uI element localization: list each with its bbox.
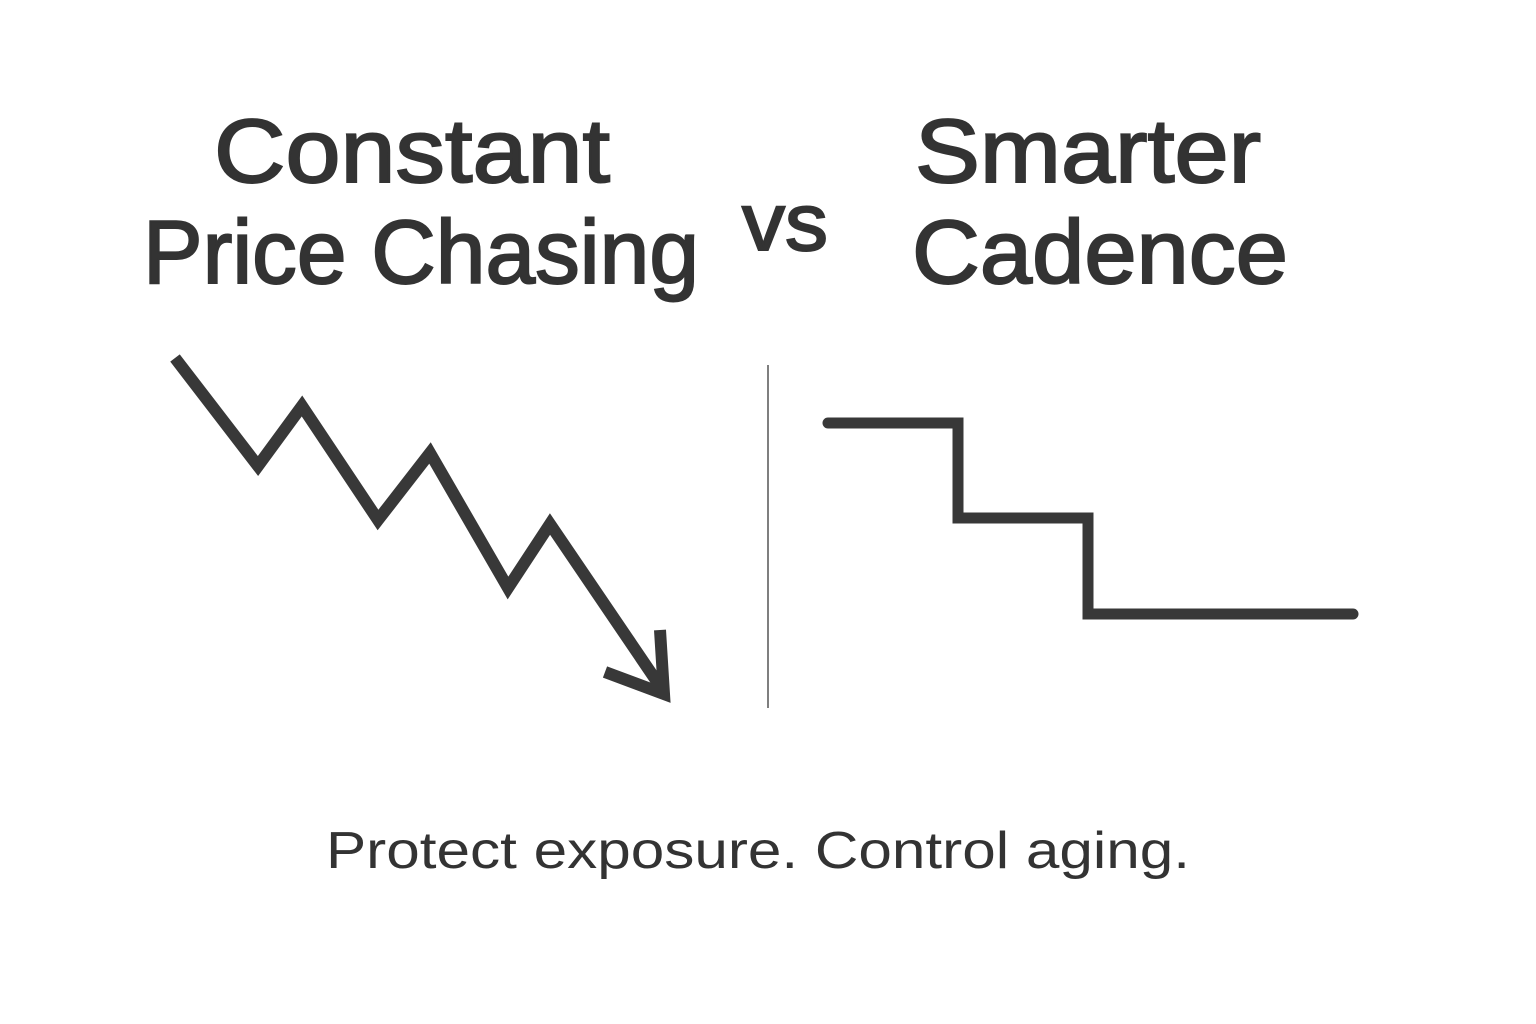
- title: right: Cadence: [912, 203, 1288, 303]
- chart: zigzag down arrow: [175, 358, 664, 694]
- chart: step cadence: [828, 423, 1353, 614]
- title: left: [143, 102, 699, 303]
- tagline: Protect exposure. Control aging.: [326, 822, 1190, 880]
- title: right: [912, 102, 1288, 303]
- title: right: Smarter: [915, 102, 1261, 202]
- title: left: Constant: [214, 102, 610, 202]
- divider: [767, 365, 769, 708]
- title: left: Price Chasing: [143, 203, 699, 303]
- vs label: vs: [742, 177, 828, 268]
